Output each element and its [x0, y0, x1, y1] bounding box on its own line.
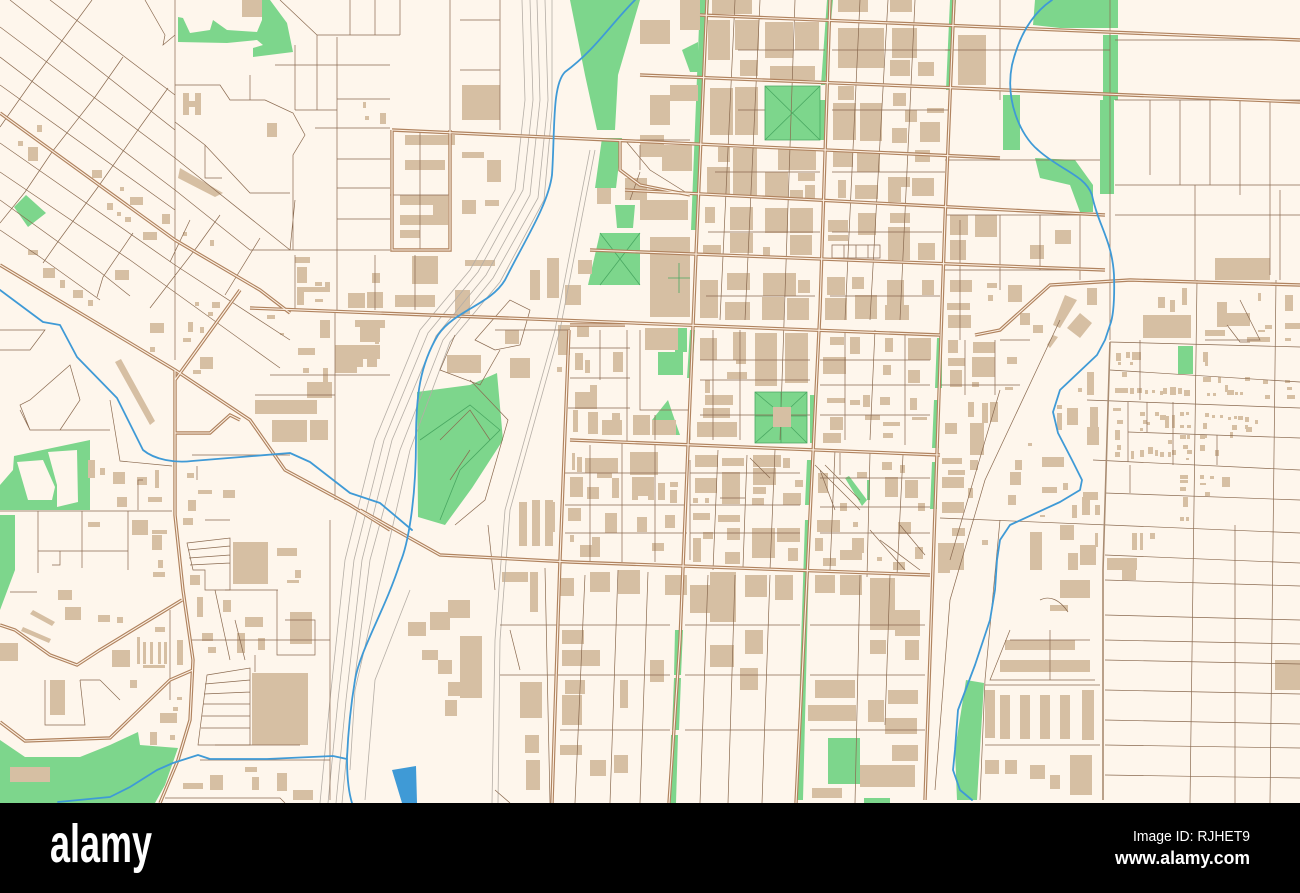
river: east — [953, 0, 1114, 800]
water body — [392, 766, 417, 803]
footer bar — [0, 803, 1300, 893]
rivers — [0, 0, 1114, 803]
white inner ponds in west park — [17, 450, 78, 507]
image id: Image ID: RJHET9 — [1133, 828, 1250, 845]
light double street along east side — [1103, 342, 1110, 800]
website: www.alamy.com — [1114, 848, 1250, 868]
river: south-west — [58, 755, 347, 802]
park outlines and paths — [420, 86, 820, 520]
parking lots with hatching — [187, 245, 880, 745]
river: central — [347, 0, 635, 803]
river: west — [0, 290, 412, 530]
park centre plaza — [773, 407, 791, 427]
logo wordmark: alamy — [50, 814, 152, 874]
railway corridor lines — [320, 0, 595, 803]
